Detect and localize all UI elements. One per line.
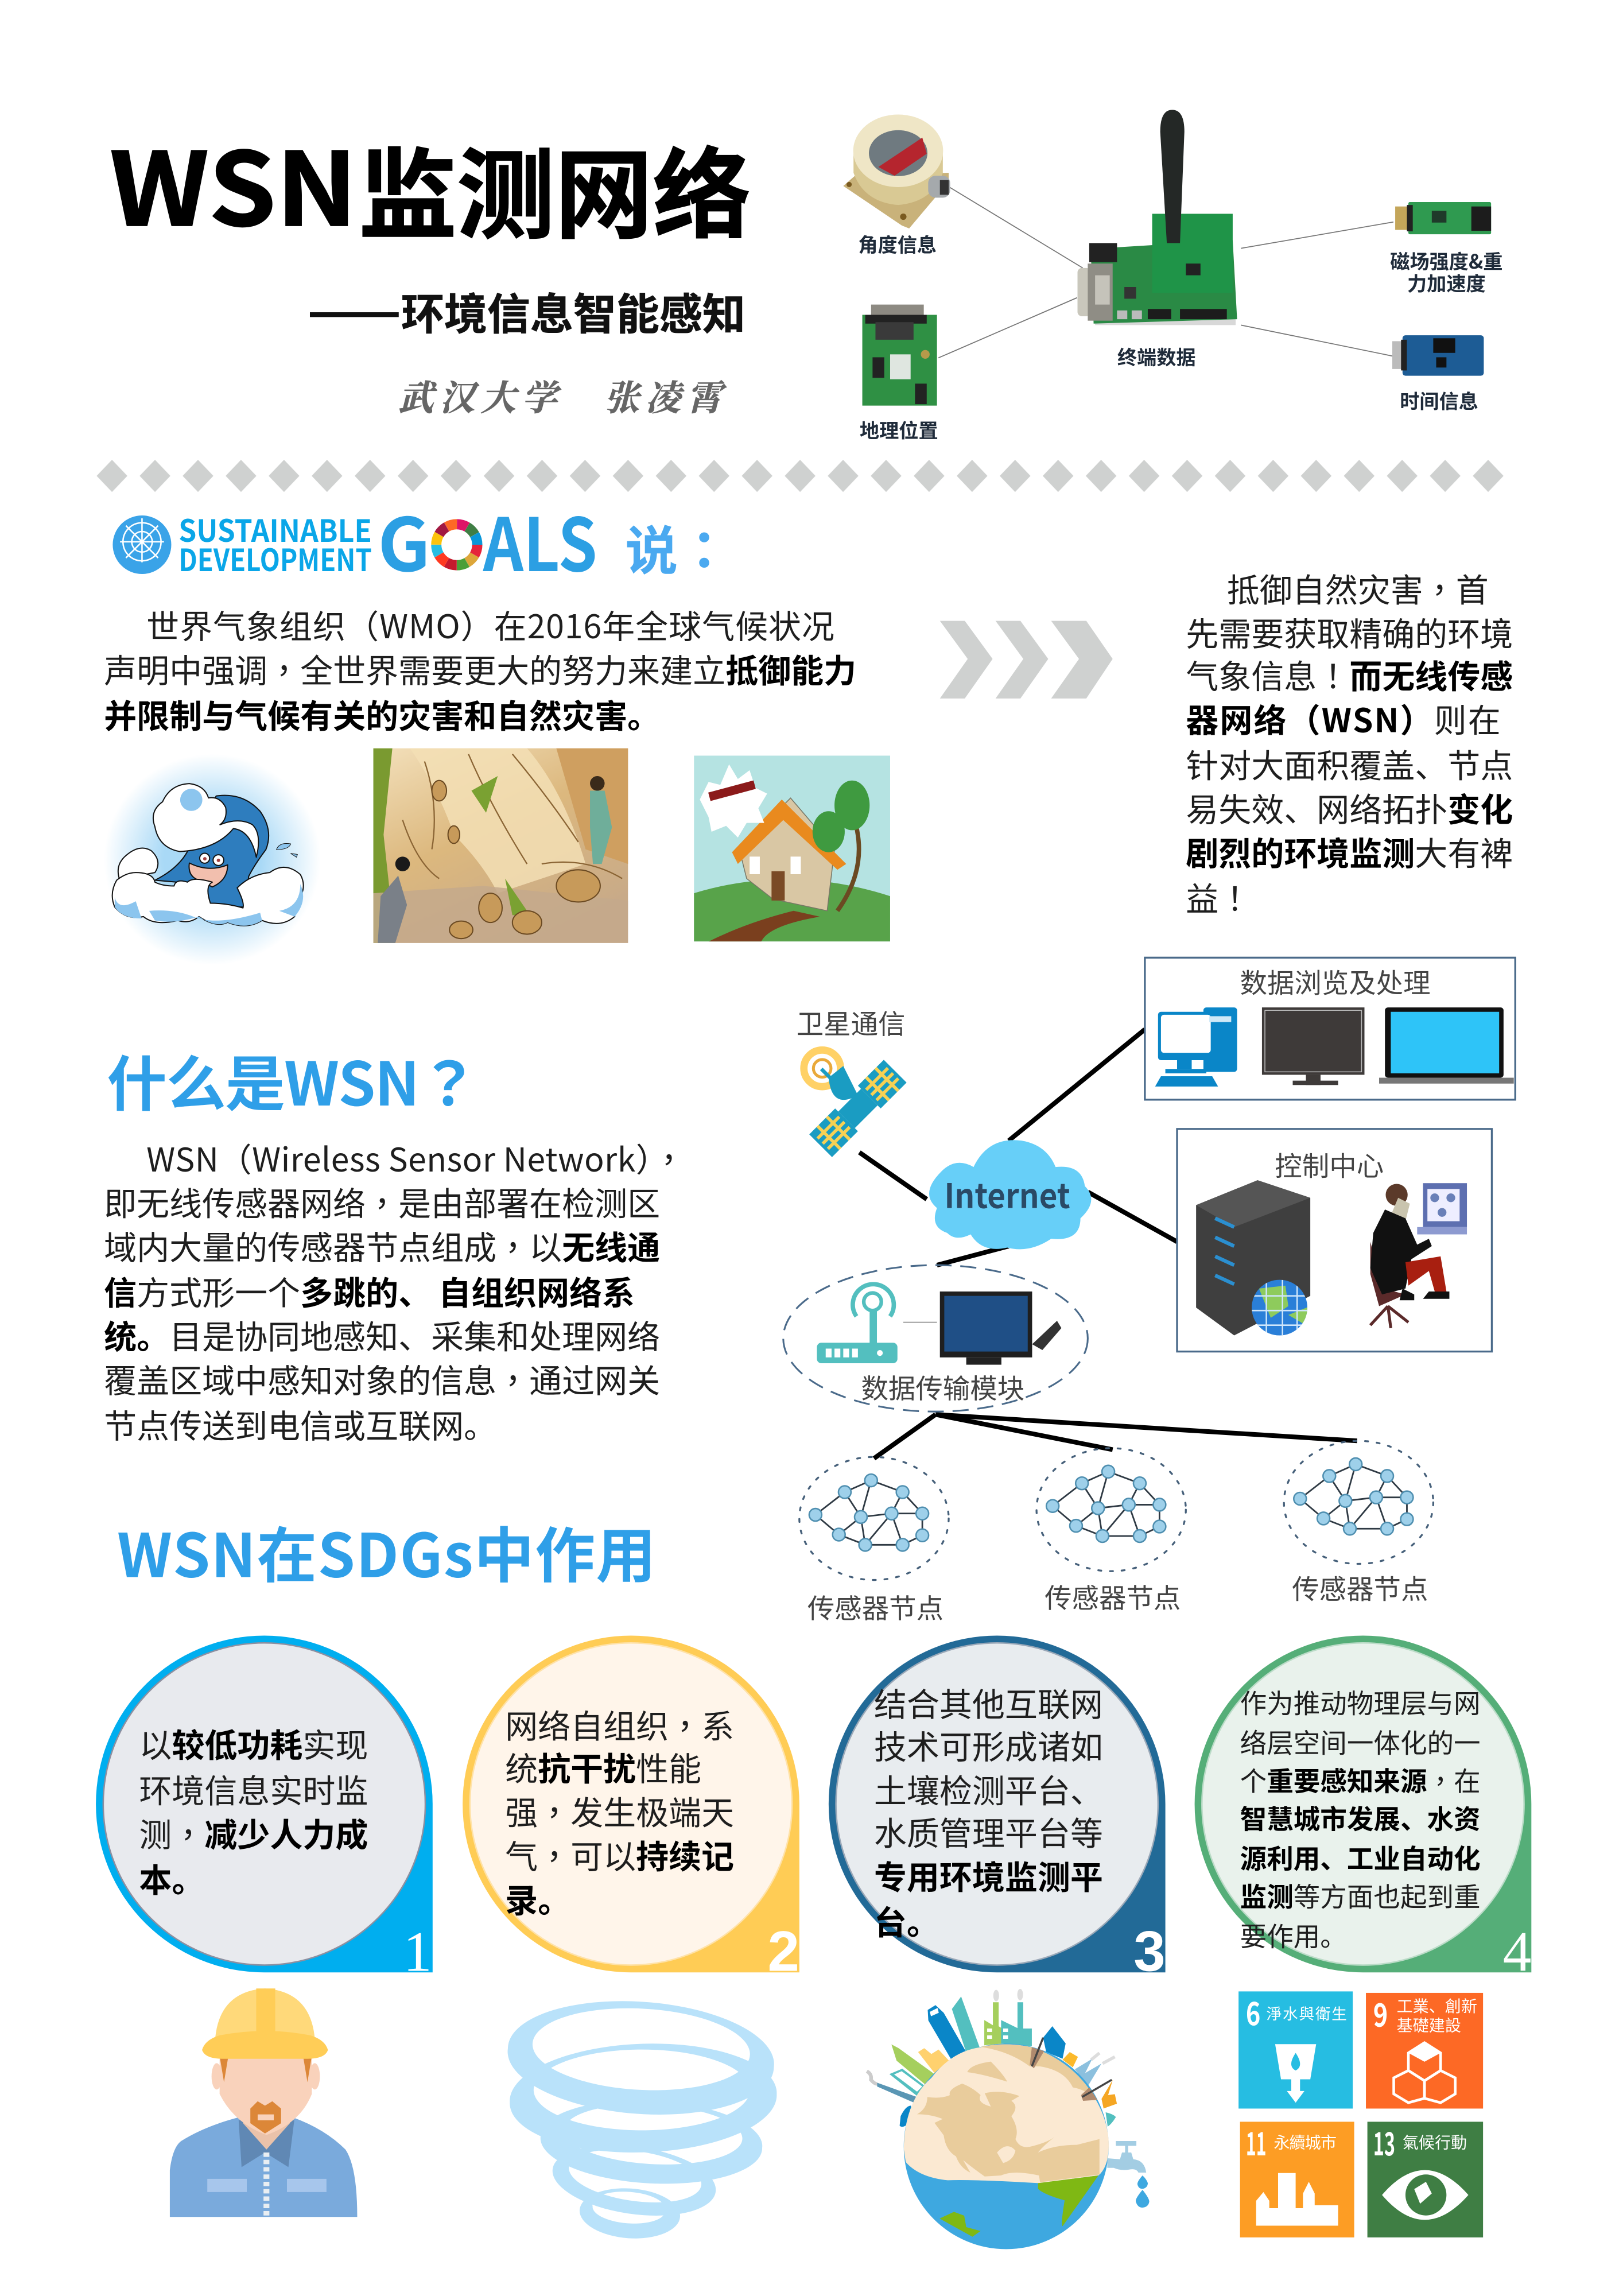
text: WMO statement: 并限制与气候有关的灾害和自然灾害。 (104, 691, 660, 738)
text: disaster prevention (1186, 564, 1513, 921)
panel: monitoring platforms: 台。 (874, 1897, 939, 1944)
text: disaster prevention: 抵御自然灾害，首 (1227, 564, 1489, 611)
SDG heading: 说： (625, 509, 731, 585)
sensor network 3: 传感器节点 (1292, 1568, 1428, 1607)
SDG tile 6: 6 (1246, 1988, 1260, 2035)
illustration: landslide (373, 748, 628, 943)
SDG tile 11 (1240, 2119, 1354, 2237)
text: disaster prevention: 气象信息！而无线传感 (1186, 651, 1513, 698)
sensor labels: 终端数据 (1117, 342, 1196, 370)
arrow: chevrons (940, 621, 1113, 699)
panel: smart city: 源利用、工业自动化 (1240, 1838, 1481, 1876)
icon: worker (170, 1988, 357, 2217)
SDG tile 11: 永續城市 (1273, 2130, 1337, 2153)
text: disaster prevention: 先需要获取精确的环境 (1186, 608, 1513, 656)
panel: control centre: 控制中心 (1275, 1144, 1384, 1184)
panel: monitoring platforms: 技术可形成诸如 (874, 1721, 1103, 1768)
text: WMO statement: 世界气象组织（WMO）在2016年全球气候状况 (146, 601, 834, 648)
text: disaster prevention: 剧烈的环境监测大有裨 (1186, 828, 1513, 875)
panel: self organising: 气，可以持续记 (505, 1831, 734, 1878)
sensor network 1 (799, 1457, 949, 1626)
panel: data browsing: 数据浏览及处理 (1240, 961, 1431, 1001)
panel: low power (96, 1635, 433, 1984)
diamond divider (96, 460, 1504, 492)
sensor labels: 时间信息 (1400, 386, 1478, 414)
icon: operator (1370, 1183, 1467, 1328)
SDG tile 9: 9 (1373, 1990, 1388, 2037)
panel: smart city: 监测等方面也起到重 (1240, 1876, 1481, 1914)
icon: server (1196, 1180, 1310, 1339)
hardware diagram (843, 110, 1502, 444)
heading: WSN in SDGs: WSN在SDGs中作用 (117, 1508, 656, 1595)
text: WSN definition: 域内大量的传感器节点组成，以无线通 (104, 1222, 660, 1269)
SDG heading: G (378, 486, 430, 592)
sensor network 2: 传感器节点 (1045, 1576, 1181, 1616)
text: disaster prevention: 针对大面积覆盖、节点 (1186, 740, 1513, 788)
sensor labels: 力加速度 (1407, 268, 1486, 297)
panel: monitoring platforms: 结合其他互联网 (874, 1679, 1103, 1726)
text: WMO statement (104, 601, 856, 738)
SDG tile 13 (1368, 2119, 1483, 2237)
icon: magnetometer module (1395, 202, 1491, 234)
sensor labels (858, 229, 1502, 444)
subtitle: 环境信息智能感知 (401, 280, 746, 342)
panel: low power: 本。 (139, 1855, 204, 1902)
author: 武汉大学 张凌霄 (398, 370, 727, 420)
panel: self organising: 统抗干扰性能 (505, 1743, 701, 1790)
icon: tornado (508, 2001, 776, 2239)
icon: clock module (1392, 335, 1484, 376)
data transmission module (783, 1265, 1088, 1411)
heading: what is WSN: 什么是WSN？ (107, 1037, 479, 1123)
panel: smart city: 作为推动物理层与网 (1240, 1683, 1481, 1721)
icon: GPS board (863, 305, 937, 406)
panel: monitoring platforms: 专用环境监测平 (874, 1852, 1103, 1899)
panel: monitoring platforms: 水质管理平台等 (874, 1808, 1103, 1855)
icon: router (817, 1284, 898, 1363)
SDG tile 9: 基礎建設 (1397, 2012, 1461, 2036)
title: WSN (110, 108, 357, 255)
icon: earth and city (867, 1989, 1150, 2249)
text: WMO statement: 声明中强调，全世界需要更大的努力来建立抵御能力 (104, 645, 856, 692)
panel: self organising: 录。 (505, 1875, 570, 1922)
sensor network 1: 传感器节点 (807, 1587, 943, 1626)
panel: low power: 1 (403, 1920, 432, 1984)
panel: monitoring platforms: 土壤检测平台、 (874, 1765, 1103, 1812)
icon: angle sensor (843, 114, 950, 228)
icon: main terminal board (1078, 110, 1237, 325)
panel: low power: 以较低功耗实现 (139, 1720, 368, 1767)
illustration: flood wave (104, 754, 321, 965)
network diagram (783, 957, 1515, 1626)
cloud: Internet (929, 1140, 1091, 1249)
title (110, 108, 751, 259)
icon: satellite (804, 1050, 907, 1157)
icon: GPRS device (940, 1292, 1061, 1365)
SDG tile 13: 13 (1373, 2119, 1395, 2165)
SDG heading: ALS (483, 486, 597, 592)
subtitle: —— (308, 273, 401, 342)
text: disaster prevention: 器网络（WSN）则在 (1186, 695, 1501, 742)
text: WSN definition: 覆盖区域中感知对象的信息，通过网关 (104, 1355, 660, 1402)
icon: monitor (1262, 1007, 1364, 1085)
panel: low power: 测，减少人力成 (139, 1809, 368, 1856)
panel: smart city: 络层空间一体化的一 (1240, 1723, 1481, 1761)
SDG heading: DEVELOPMENT (178, 536, 372, 580)
panel: smart city: 智慧城市发展、水资 (1240, 1798, 1481, 1837)
panel: low power: 环境信息实时监 (139, 1765, 368, 1812)
SDG heading: SUSTAINABLE (178, 507, 372, 551)
panel: self organising: 强，发生极端天 (505, 1787, 734, 1835)
icon: desktop PC (1155, 1007, 1237, 1087)
icon: UN emblem (112, 515, 171, 574)
sensor network 3 (1284, 1441, 1433, 1607)
text: WSN definition (104, 1134, 685, 1448)
panel: self organising: 网络自组织，系 (505, 1701, 734, 1748)
cloud: Internet: Internet (944, 1169, 1070, 1218)
text: WSN definition: WSN（Wireless Sensor Network）， (146, 1134, 685, 1181)
panel: smart city: 个重要感知来源，在 (1240, 1760, 1481, 1799)
data transmission module: 数据传输模块 (861, 1367, 1024, 1406)
panel: self organising (463, 1635, 799, 1984)
label: satellite: 卫星通信 (797, 1002, 905, 1042)
SDG tile 9: 工業、創新 (1397, 1994, 1477, 2017)
text: WSN definition: 节点传送到电信或互联网。 (104, 1401, 496, 1448)
SDG tile 13: 氣候行動 (1403, 2130, 1467, 2153)
SDG heading (112, 486, 731, 592)
sensor labels: 地理位置 (860, 415, 938, 444)
sensor labels: 角度信息 (858, 229, 937, 258)
panel: smart city: 4 (1503, 1920, 1531, 1984)
SDG tile 6 (1238, 1988, 1353, 2108)
panel: self organising: 2 (767, 1920, 799, 1984)
text: WSN definition: 统。目是协同地感知、采集和处理网络 (104, 1311, 660, 1358)
illustration: earthquake house (694, 755, 890, 941)
panel: monitoring platforms: 3 (1133, 1920, 1166, 1984)
panel: control centre (1177, 1129, 1492, 1352)
text: disaster prevention: 益！ (1186, 874, 1251, 921)
panel: smart city (1195, 1635, 1531, 1984)
sensor network 2 (1036, 1448, 1186, 1616)
text: WSN definition: 信方式形一个多跳的、 自组织网络系 (104, 1267, 635, 1314)
panel: data browsing (1145, 957, 1515, 1100)
icon: SDG wheel (436, 524, 477, 565)
sensor labels: 磁场强度&重 (1390, 246, 1502, 274)
SDG tile 11: 11 (1246, 2119, 1267, 2165)
SDG tile 6: 淨水與衛生 (1267, 2002, 1347, 2024)
text: WSN definition: 即无线传感器网络，是由部署在检测区 (104, 1178, 660, 1225)
icon: laptop (1379, 1007, 1514, 1084)
panel: smart city: 要作用。 (1240, 1915, 1347, 1954)
text: disaster prevention: 易失效、网络拓扑变化 (1186, 784, 1513, 831)
panel: monitoring platforms (829, 1635, 1166, 1984)
title: 监测网络 (359, 117, 751, 259)
SDG tile 9 (1366, 1990, 1483, 2108)
